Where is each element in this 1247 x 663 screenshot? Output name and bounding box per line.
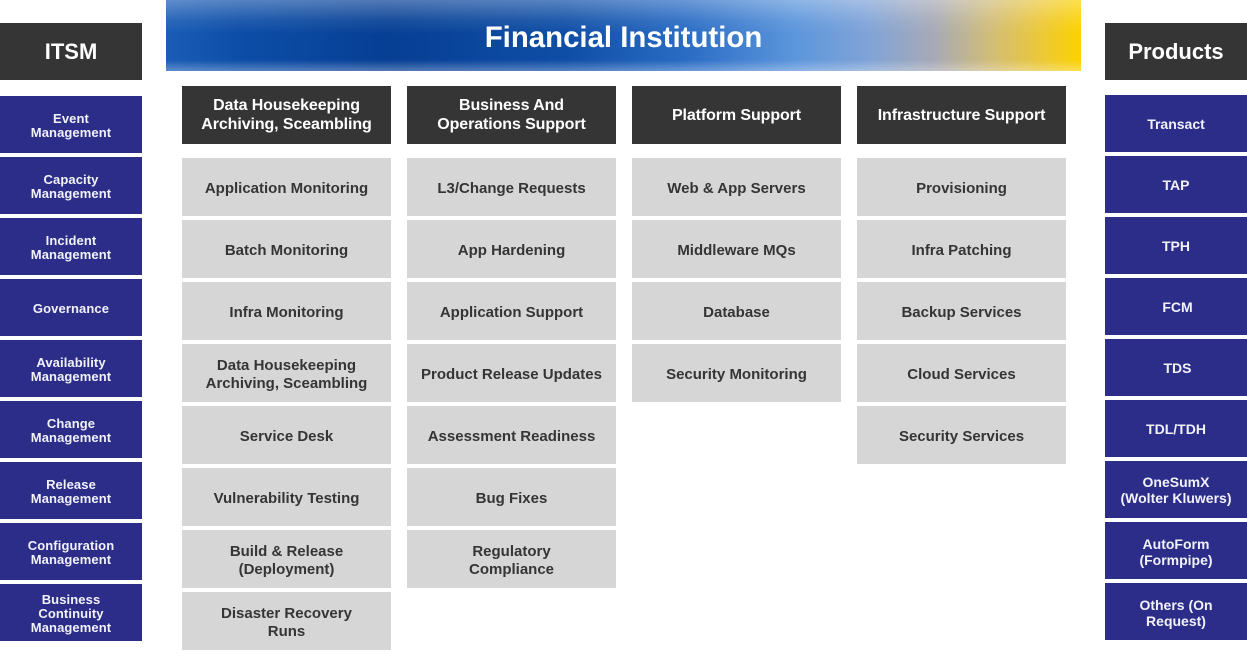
item: Others (On Request): Others (On xyxy=(1139,596,1213,612)
heading: Data Housekeeping Archiving, Sceambling: Archiving, Sceambling xyxy=(201,116,372,133)
item: Transact xyxy=(1105,95,1247,152)
heading: Infrastructure Support xyxy=(857,86,1066,144)
cell: Product Release Updates xyxy=(407,344,616,402)
item: OneSumX (Wolter Kluwers): OneSumX xyxy=(1143,474,1209,490)
cell: Infra Patching xyxy=(857,220,1066,278)
cell: Infra Monitoring xyxy=(182,282,391,340)
item: Release Management: Release xyxy=(46,476,96,492)
cell: Regulatory Compliance xyxy=(407,530,616,588)
cell: Product Release Updates: Product Release Updates xyxy=(421,366,602,383)
cell: App Hardening xyxy=(407,220,616,278)
item: TDL/TDH: TDL/TDH xyxy=(1146,420,1206,436)
cell: Batch Monitoring: Batch Monitoring xyxy=(225,242,348,259)
cell: Data Housekeeping Archiving, Sceambling: Data Housekeeping xyxy=(217,357,356,374)
cell: Build & Release (Deployment): Build & Release xyxy=(230,543,343,560)
heading: Data Housekeeping Archiving, Sceambling xyxy=(182,86,391,144)
item: Governance: Governance xyxy=(33,300,109,316)
cell: Infra Patching: Infra Patching xyxy=(911,242,1012,259)
heading: Infrastructure Support: Infrastructure Support xyxy=(878,106,1045,124)
cell: Web & App Servers xyxy=(632,158,841,216)
item: AutoForm (Formpipe): AutoForm xyxy=(1143,536,1209,552)
banner: Financial Institution: Financial Institution xyxy=(485,20,762,54)
item: Event Management: Management xyxy=(31,124,111,140)
cell: Security Services: Security Services xyxy=(899,428,1024,445)
item: FCM: FCM xyxy=(1162,298,1193,314)
item: Capacity Management: Capacity xyxy=(44,172,98,186)
cell: Regulatory Compliance: Compliance xyxy=(469,561,554,578)
cell: Batch Monitoring xyxy=(182,220,391,278)
cell: Security Monitoring xyxy=(632,344,841,402)
item: TAP xyxy=(1105,156,1247,213)
cell: Vulnerability Testing xyxy=(182,468,391,526)
banner: Financial Institution xyxy=(166,0,1081,71)
cell: Infra Monitoring: Infra Monitoring xyxy=(229,304,344,321)
item: TDS: TDS xyxy=(1164,360,1192,376)
cell: Service Desk xyxy=(182,406,391,464)
item: Transact: Transact xyxy=(1147,116,1205,132)
item: AutoForm (Formpipe): (Formpipe) xyxy=(1139,552,1213,568)
item: Business Continuity Management: Continuity xyxy=(38,606,104,620)
item: Business Continuity Management: Management xyxy=(31,620,111,634)
panel: Products column xyxy=(1105,23,1247,640)
cell: Assessment Readiness: Assessment Readiness xyxy=(428,428,595,445)
item: Release Management xyxy=(0,462,142,519)
item: Incident Management xyxy=(0,218,142,275)
item: TDL/TDH xyxy=(1105,400,1247,457)
panel: ITSM column xyxy=(0,23,142,641)
item: TAP: TAP xyxy=(1163,176,1189,192)
cell: Vulnerability Testing: Vulnerability Testing xyxy=(214,490,359,507)
cell: L3/Change Requests xyxy=(407,158,616,216)
item: Event Management xyxy=(0,96,142,153)
heading: Platform Support: Platform Support xyxy=(672,106,801,124)
heading: Products xyxy=(1105,23,1247,80)
cell: Backup Services xyxy=(857,282,1066,340)
cell: Regulatory Compliance: Regulatory xyxy=(472,543,551,560)
item: Others (On Request) xyxy=(1105,583,1247,640)
cell: Database xyxy=(632,282,841,340)
cell: Build & Release (Deployment) xyxy=(182,530,391,588)
cell: Backup Services: Backup Services xyxy=(901,304,1022,321)
cell: Data Housekeeping Archiving, Sceambling: Archiving, Sceambling xyxy=(206,375,367,392)
item: TDS xyxy=(1105,339,1247,396)
cell: Application Support: Application Support xyxy=(440,304,583,321)
heading: Platform Support xyxy=(632,86,841,144)
item: Business Continuity Management: Business xyxy=(42,592,100,606)
cell: Bug Fixes xyxy=(407,468,616,526)
heading: Business And Operations Support: Business And xyxy=(459,97,564,114)
item: Event Management: Event xyxy=(53,110,89,126)
item: Configuration Management xyxy=(0,523,142,580)
cell: Cloud Services xyxy=(857,344,1066,402)
item: Incident Management: Management xyxy=(31,246,111,262)
item: Incident Management: Incident xyxy=(46,232,96,248)
cell: Disaster Recovery Runs: Disaster Recovery xyxy=(221,605,352,622)
item: Availability Management: Management xyxy=(31,368,111,384)
item: Change Management xyxy=(0,401,142,458)
cell: Security Services xyxy=(857,406,1066,464)
heading: Products: Products xyxy=(1128,38,1224,64)
item: Business Continuity Management xyxy=(0,584,142,641)
cell: Provisioning: Provisioning xyxy=(916,180,1007,197)
item: Others (On Request): Request) xyxy=(1146,612,1206,628)
cell: Database: Database xyxy=(703,304,770,321)
cell: Application Monitoring xyxy=(182,158,391,216)
panel: Business And Operations Support column xyxy=(407,86,616,588)
cell: Application Monitoring: Application Monitoring xyxy=(205,180,368,197)
panel: Data Housekeeping column xyxy=(182,86,391,650)
item: TPH: TPH xyxy=(1162,238,1190,254)
panel: Infrastructure Support column xyxy=(857,86,1066,464)
item: AutoForm (Formpipe) xyxy=(1105,522,1247,579)
heading: ITSM xyxy=(0,23,142,80)
cell: Web & App Servers: Web & App Servers xyxy=(667,180,806,197)
cell: Service Desk: Service Desk xyxy=(240,428,333,445)
cell: Disaster Recovery Runs: Runs xyxy=(268,623,305,640)
cell: Security Monitoring: Security Monitoring xyxy=(666,366,807,383)
cell: Middleware MQs: Middleware MQs xyxy=(677,242,796,259)
item: OneSumX (Wolter Kluwers): (Wolter Kluwers) xyxy=(1120,490,1231,506)
cell: L3/Change Requests: L3/Change Requests xyxy=(437,180,586,197)
cell: Application Support xyxy=(407,282,616,340)
item: Change Management: Change xyxy=(47,416,95,430)
cell: Provisioning xyxy=(857,158,1066,216)
cell: Bug Fixes: Bug Fixes xyxy=(476,490,547,507)
cell: Cloud Services: Cloud Services xyxy=(907,366,1016,383)
cell: Data Housekeeping Archiving, Sceambling xyxy=(182,344,391,402)
heading: Business And Operations Support xyxy=(407,86,616,144)
cell: Middleware MQs xyxy=(632,220,841,278)
heading: Business And Operations Support: Operations Support xyxy=(437,116,586,133)
item: Capacity Management xyxy=(0,157,142,214)
cell: App Hardening: App Hardening xyxy=(458,242,565,259)
heading: Data Housekeeping Archiving, Sceambling: Data Housekeeping xyxy=(213,97,360,114)
item: OneSumX (Wolter Kluwers) xyxy=(1105,461,1247,518)
item: Change Management: Management xyxy=(31,430,111,444)
cell: Assessment Readiness xyxy=(407,406,616,464)
heading: ITSM: ITSM xyxy=(45,38,97,64)
item: Availability Management xyxy=(0,340,142,397)
item: Capacity Management: Management xyxy=(31,186,111,200)
cell: Build & Release (Deployment): (Deployment) xyxy=(239,561,334,578)
item: FCM xyxy=(1105,278,1247,335)
item: Governance xyxy=(0,279,142,336)
panel: Platform Support column xyxy=(632,86,841,402)
item: TPH xyxy=(1105,217,1247,274)
item: Configuration Management: Management xyxy=(31,552,111,566)
cell: Disaster Recovery Runs xyxy=(182,592,391,650)
item: Configuration Management: Configuration xyxy=(28,538,114,552)
item: Availability Management: Availability xyxy=(36,354,106,370)
item: Release Management: Management xyxy=(31,490,111,506)
